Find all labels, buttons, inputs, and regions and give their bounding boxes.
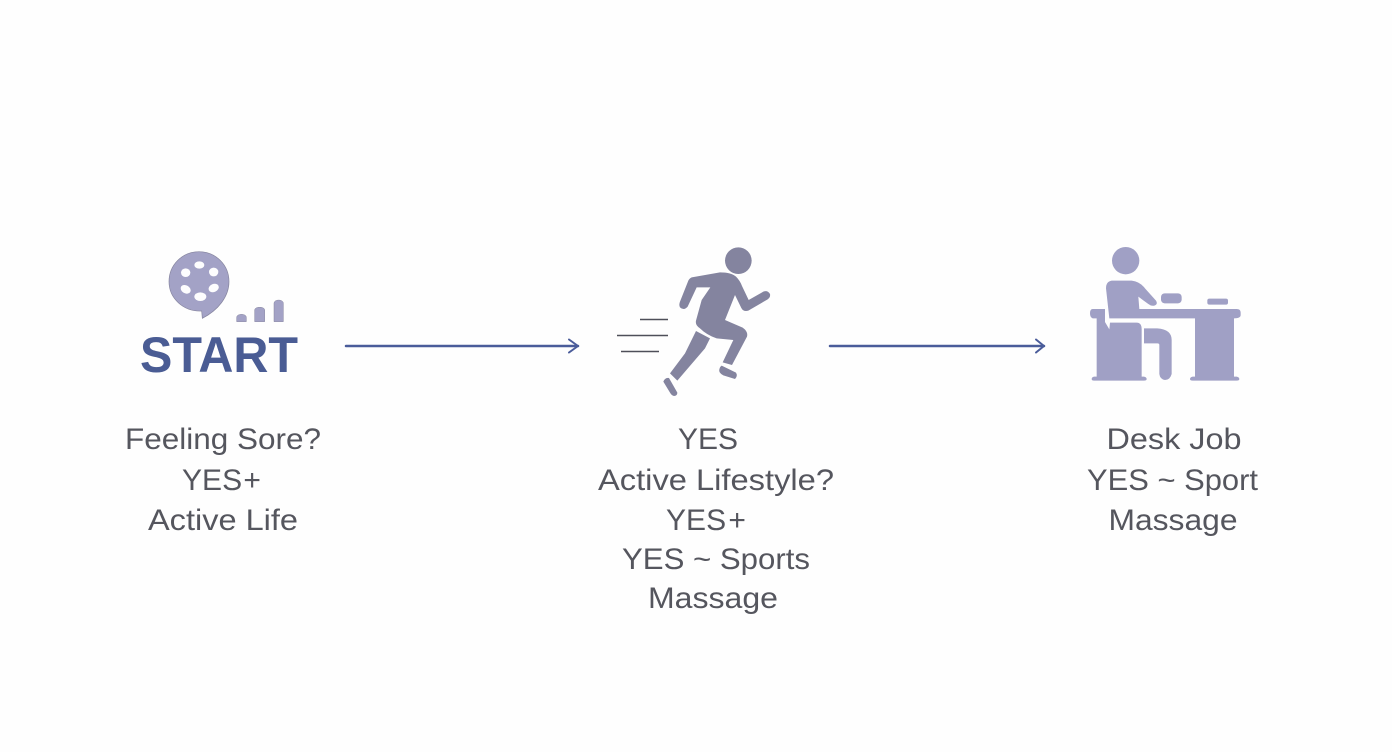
text: step 2 question: YES + (666, 504, 746, 537)
text: step 2 question: YES (678, 423, 738, 456)
text: step 3 answer: YES ~ Sport (1087, 464, 1259, 497)
icon: motion lines (617, 320, 668, 352)
arrow: start to active (346, 340, 578, 352)
text: step 1 question: YES + (182, 464, 261, 497)
step 3: desk job (1087, 247, 1259, 537)
text: step 3 answer: Desk Job (1106, 423, 1242, 456)
text: step 1 question: Active Life (148, 504, 298, 537)
text: step 1 question (125, 423, 321, 537)
icon: speech bubble film reel (169, 252, 229, 318)
text: step 2 question: Massage (648, 582, 778, 615)
text: step 3 answer (1087, 423, 1259, 537)
text: step 3 answer: Massage (1108, 504, 1238, 537)
text: step 2 question: YES ~ Sports (622, 543, 810, 576)
icon: person at desk (1090, 247, 1241, 381)
step 1: start (125, 252, 321, 537)
step 2: active lifestyle (598, 247, 834, 615)
text: step 2 question: Active Lifestyle? (598, 464, 834, 497)
icon: running person (663, 247, 770, 396)
text: step 1 question: Feeling Sore? (125, 423, 321, 456)
text: step 2 question (598, 423, 834, 615)
start heading: START (140, 327, 298, 383)
arrow: active to desk job (830, 340, 1044, 352)
icon: signal bars (237, 300, 283, 322)
